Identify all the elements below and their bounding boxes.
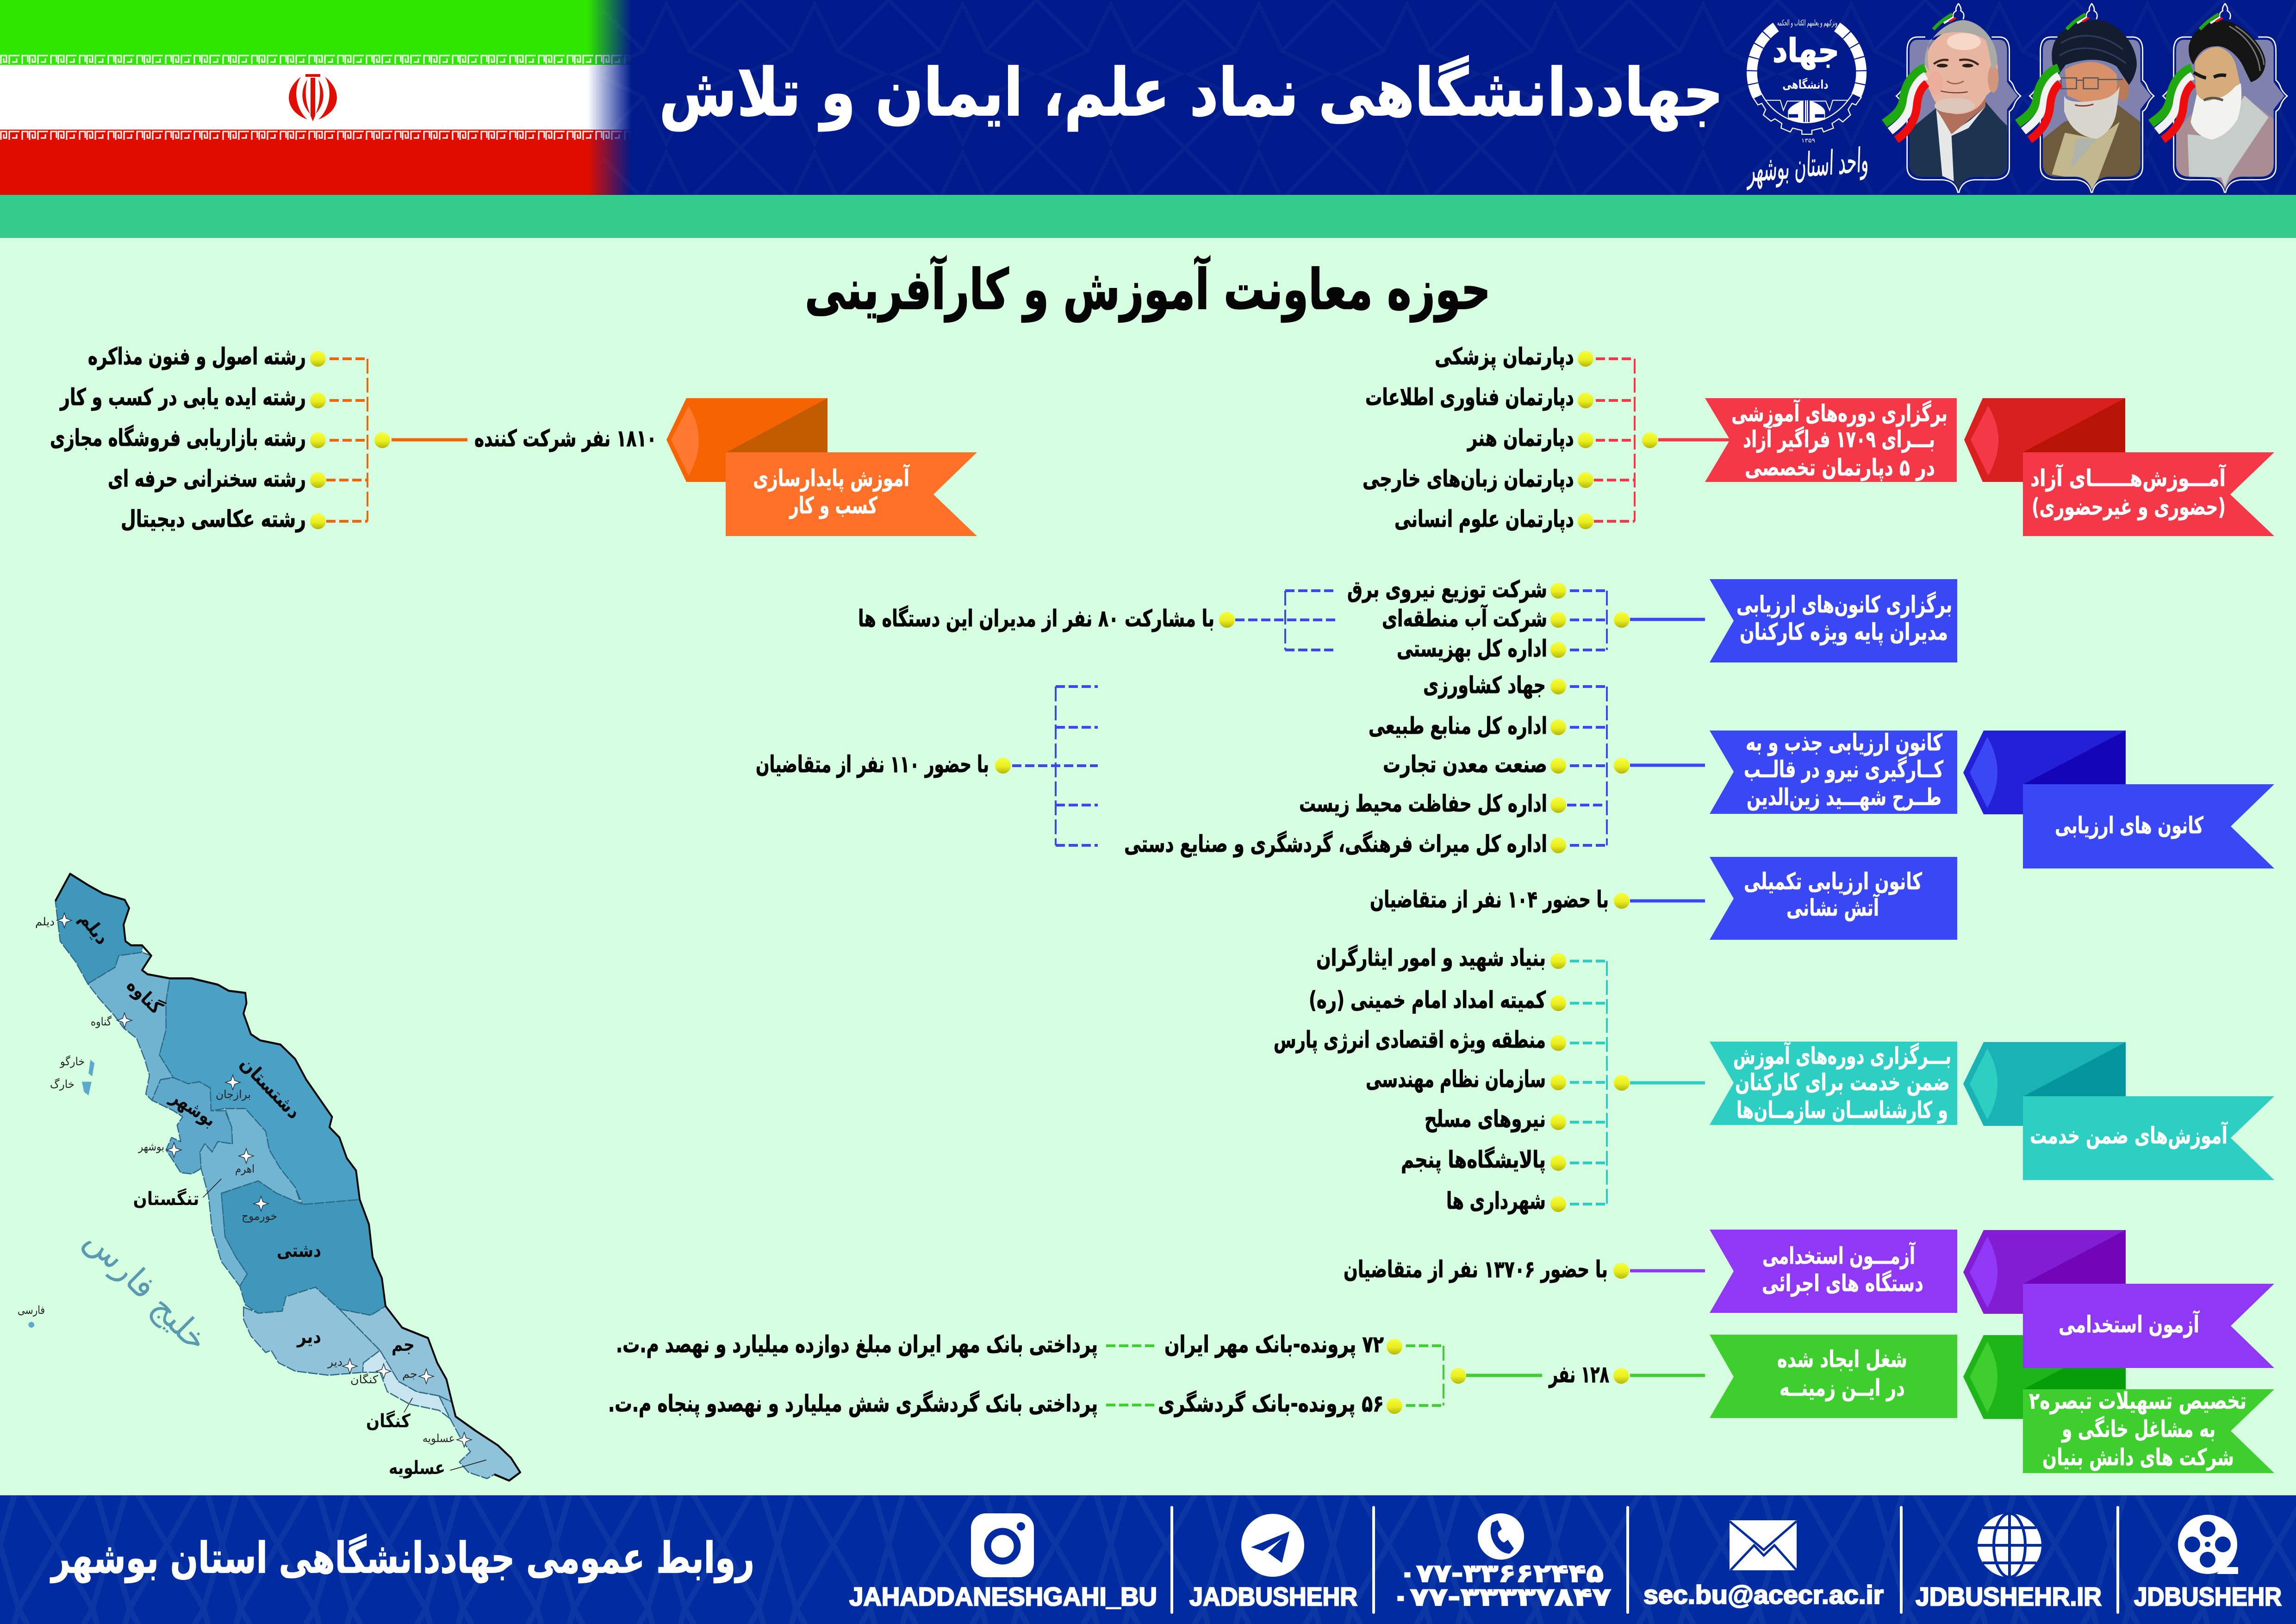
orange participants count: ۱۸۱۰ نفر شرکت کننده xyxy=(474,425,657,452)
green flag: در ایــن زمینــه xyxy=(1780,1374,1905,1402)
green detail rows xyxy=(608,1331,1384,1418)
icon: mail xyxy=(1730,1520,1797,1570)
red ribbon xyxy=(1964,398,2274,536)
purple ribbon: آزمون استخدامی xyxy=(2059,1310,2200,1338)
teal list of organizations xyxy=(1274,944,1705,1215)
blue flag: complementary assessment: آتش نشانی xyxy=(1786,893,1879,922)
footer bar xyxy=(0,1495,2296,1624)
map small city labels xyxy=(18,915,455,1445)
teal flag: ضمن خدمت برای کارکنان xyxy=(1735,1069,1950,1096)
red description flag xyxy=(1705,398,1957,482)
teal list of organizations: نیروهای مسلح xyxy=(1425,1106,1546,1133)
red description flag: برگزاری دوره‌های آموزشی xyxy=(1731,399,1948,427)
green ribbon back xyxy=(1963,1335,2126,1419)
teal flag: بـــرگزاری دوره‌های آموزش xyxy=(1733,1042,1951,1070)
icon: instagram xyxy=(971,1513,1034,1577)
teal list of organizations: منطقه ویژه اقتصادی انرژی پارس xyxy=(1274,1026,1546,1054)
map small city labels: عسلویه xyxy=(423,1432,455,1445)
map county labels xyxy=(75,908,445,1479)
note: managers attendance: با مشارکت ۸۰ نفر از مدیران این دستگاه ها xyxy=(858,605,1214,632)
portrait 1 xyxy=(1885,3,2021,193)
blue flag: recruitment assessment: کانون ارزیابی جذب و به xyxy=(1746,729,1943,756)
red list of departments: دپارتمان فناوری اطلاعات xyxy=(1365,384,1574,411)
map county labels: دیر xyxy=(296,1326,321,1348)
logo: jahad daneshgahi xyxy=(1752,18,1861,144)
orange list of fields: رشته سخنرانی حرفه ای xyxy=(108,465,306,493)
blue flag: complementary assessment: کانون ارزیابی تکمیلی xyxy=(1744,868,1923,895)
icon: phone xyxy=(1478,1513,1524,1560)
green detail rows: ۵۶ پرونده-بانک گردشگری xyxy=(1158,1390,1384,1418)
orange list of fields: رشته ایده یابی در کسب و کار xyxy=(59,384,306,411)
map small city labels: خارگ xyxy=(50,1078,75,1091)
panel: sustainability business training (orange) xyxy=(50,343,977,536)
map county labels: دیلم xyxy=(75,908,113,949)
footer social handles xyxy=(849,1580,2282,1611)
panel: jobs created (green) xyxy=(608,1331,2274,1473)
map county labels: جم xyxy=(392,1334,415,1355)
teal list of organizations: بنیاد شهید و امور ایثارگران xyxy=(1316,944,1546,972)
map small city labels: خارگو xyxy=(60,1055,85,1068)
orange list of fields: رشته عکاسی دیجیتال xyxy=(121,506,306,533)
blue flag: managers assessment: مدیران پایه ویژه کارکنان xyxy=(1740,618,1948,646)
blue flag: managers assessment xyxy=(1710,579,1957,662)
orange list of fields: رشته بازاریابی فروشگاه مجازی xyxy=(50,425,306,452)
green ribbon front xyxy=(2023,1387,2274,1473)
blue ribbon xyxy=(1963,731,2274,868)
phone numbers xyxy=(1391,1559,1611,1612)
teal list of organizations: شهرداری ها xyxy=(1446,1187,1546,1215)
map small city labels: فارسی xyxy=(18,1304,45,1317)
purple flag: دستگاه های اجرائی xyxy=(1762,1270,1923,1297)
blue flag: managers assessment: برگزاری کانون‌های ارزیابی xyxy=(1736,591,1952,618)
list: organizations group two: اداره کل منابع طبیعی xyxy=(1369,712,1547,740)
iran flag xyxy=(0,0,648,195)
green flag xyxy=(1710,1335,1957,1418)
blue flag: recruitment assessment: کــارگیری نیرو در قالــب xyxy=(1744,756,1944,783)
red list of departments: دپارتمان علوم انسانی xyxy=(1394,506,1574,533)
red ribbon: آمـــوزش‌هــــــای آزاد xyxy=(2030,464,2226,492)
phone numbers: ۰۷۷-۳۳۶۶۲۴۴۵ xyxy=(1399,1559,1604,1588)
list: organizations group two: اداره کل میراث فرهنگی، گردشگری و صنایع دستی xyxy=(1124,831,1547,858)
orange list of fields: رشته اصول و فنون مذاکره xyxy=(88,343,306,370)
map county labels: دشتستان xyxy=(236,1053,305,1124)
footer public relations text: روابط عمومی جهاددانشگاهی استان بوشهر xyxy=(50,1533,754,1583)
red connector xyxy=(1642,432,1730,448)
red description flag: بـــرای ۱۷۰۹ فراگیر آزاد xyxy=(1743,425,1935,453)
main title: جهاددانشگاهی نماد علم، ایمان و تلاش xyxy=(659,55,1724,131)
teal list of organizations: سازمان نظام مهندسی xyxy=(1366,1066,1546,1093)
red list of departments: دپارتمان پزشکی xyxy=(1435,343,1574,370)
map: persian gulf label: خلیج فارس xyxy=(77,1220,216,1359)
portrait 2 xyxy=(2018,3,2154,193)
panel: in-service training (teal) xyxy=(1274,944,2274,1215)
map small city labels: خورموج xyxy=(242,1210,277,1223)
map city stars xyxy=(57,913,472,1447)
map small city labels: کنگان xyxy=(350,1373,379,1386)
green count: ۱۲۸ نفر xyxy=(1548,1361,1609,1388)
orange list of fields xyxy=(50,343,367,533)
green ribbon front: به مشاغل خانگی و xyxy=(2061,1416,2215,1443)
map county labels: عسلویه xyxy=(389,1457,445,1479)
teal flag: و کارشناســان سازمــان‌ها xyxy=(1736,1097,1948,1124)
map regions xyxy=(28,874,520,1480)
purple ribbon xyxy=(1963,1230,2274,1368)
list: organizations group one: اداره کل بهزیستی xyxy=(1397,635,1547,662)
green flag: شغل ایجاد شده xyxy=(1777,1346,1907,1373)
red ribbon: (حضوری و غیرحضوری) xyxy=(2032,493,2226,521)
blue flag: recruitment assessment xyxy=(1710,729,1957,814)
map county labels: بوشهر xyxy=(166,1086,220,1131)
map small city labels: بوشهر xyxy=(138,1140,164,1153)
header banner: واحد استان بوشهر xyxy=(1743,140,1869,190)
header banner xyxy=(0,0,2296,195)
teal list of organizations: پالایشگاه‌ها پنجم xyxy=(1401,1146,1546,1174)
map small city labels: دیلم xyxy=(35,915,55,928)
teal ribbon: آموزش‌های ضمن خدمت xyxy=(2030,1121,2228,1149)
logo: jahad daneshgahi: جهاد xyxy=(1773,31,1839,70)
panel: employment exam (purple) xyxy=(1344,1230,2274,1368)
map small city labels: برازجان xyxy=(216,1088,251,1101)
panel: free courses (red) xyxy=(1363,343,2274,536)
portrait 3 xyxy=(2151,3,2287,193)
blue flag: complementary assessment xyxy=(1710,857,1957,940)
green detail rows: ۷۲ پرونده-بانک مهر ایران xyxy=(1164,1331,1384,1358)
red list of departments: دپارتمان زبان‌های خارجی xyxy=(1363,465,1574,493)
flag emblem xyxy=(289,74,337,121)
logo: jahad daneshgahi: ۱۳۵۹ xyxy=(1801,137,1815,144)
icon: globe xyxy=(1978,1513,2041,1577)
map small city labels: گناوه xyxy=(91,1015,112,1028)
section heading: حوزه معاونت آموزش و کارآفرینی xyxy=(805,256,1491,323)
footer social handles: JADBUSHEHR xyxy=(1189,1582,1357,1611)
list: organizations group one xyxy=(1219,576,1705,662)
list: organizations group one: شرکت توزیع نیروی برق xyxy=(1347,576,1547,603)
map small city labels: اهرم xyxy=(235,1162,255,1175)
orange ribbon: کسب و کار xyxy=(789,492,878,519)
list: organizations group two: صنعت معدن تجارت xyxy=(1383,751,1547,778)
orange ribbon xyxy=(666,398,977,536)
blue flag: recruitment assessment: طــرح شهـــید زین‌الدین xyxy=(1747,784,1941,811)
map county labels: کنگان xyxy=(366,1410,411,1432)
icon: telegram xyxy=(1241,1514,1304,1577)
purple flag: آزمـــون استخدامی xyxy=(1762,1242,1916,1270)
logo: jahad daneshgahi: دانشگاهی xyxy=(1782,78,1829,92)
green detail rows: پرداختی بانک گردشگری شش میلیارد و نهصدو پنجاه م.ت. xyxy=(608,1390,1098,1418)
teal flag xyxy=(1710,1042,1957,1125)
red list of departments xyxy=(1363,343,1635,533)
purple flag xyxy=(1710,1230,1957,1313)
orange connector xyxy=(374,432,467,448)
map small city labels: جم xyxy=(402,1368,417,1380)
icon: film reel xyxy=(2178,1515,2238,1574)
note: 110 applicants: با حضور ۱۱۰ نفر از متقاضیان xyxy=(756,751,989,778)
green connectors xyxy=(1106,1339,1705,1414)
portraits xyxy=(1885,3,2287,193)
purple note: با حضور ۱۳۷۰۶ نفر از متقاضیان xyxy=(1344,1256,1608,1283)
map small city labels: دیر xyxy=(327,1355,342,1368)
orange ribbon: آموزش پایدارسازی xyxy=(753,464,910,492)
green band xyxy=(0,195,2296,238)
map: bushehr province xyxy=(18,874,520,1480)
list: organizations group one: شرکت آب منطقه‌ای xyxy=(1382,604,1547,632)
footer social handles: JAHADDANESHGAHI_BU xyxy=(849,1582,1157,1611)
panel: assessment centres (blue) xyxy=(756,576,2274,940)
red list of departments: دپارتمان هنر xyxy=(1467,425,1574,452)
map county labels: تنگستان xyxy=(133,1188,199,1210)
list: organizations group two xyxy=(995,672,1705,858)
teal list of organizations: کمیته امداد امام خمینی (ره) xyxy=(1309,987,1546,1014)
note: 104 applicants: با حضور ۱۰۴ نفر از متقاضیان xyxy=(1370,886,1609,913)
logo: jahad daneshgahi: ونزکیهم و یعلمهم الکتاب و الحکمه xyxy=(1777,18,1837,27)
phone numbers: ۰۷۷-۳۳۳۳۷۸۴۷ xyxy=(1391,1582,1611,1612)
teal ribbon xyxy=(1963,1042,2274,1180)
footer social handles: JDBUSHEHR xyxy=(2134,1582,2282,1611)
list: organizations group two: جهاد کشاورزی xyxy=(1423,672,1546,699)
green detail rows: پرداختی بانک مهر ایران مبلغ دوازده میلیارد و نهصد م.ت. xyxy=(616,1331,1098,1358)
footer social handles: sec.bu@acecr.ac.ir xyxy=(1643,1580,1884,1609)
footer social handles: JDBUSHEHR.IR xyxy=(1916,1582,2102,1611)
blue ribbon: کانون های ارزیابی xyxy=(2055,812,2204,839)
list: organizations group two: اداره کل حفاظت محیط زیست xyxy=(1299,790,1547,818)
map county labels: دشتی xyxy=(277,1240,321,1262)
map county labels: گناوه xyxy=(122,974,168,1018)
red description flag: در ۵ دپارتمان تخصصی xyxy=(1745,454,1935,481)
